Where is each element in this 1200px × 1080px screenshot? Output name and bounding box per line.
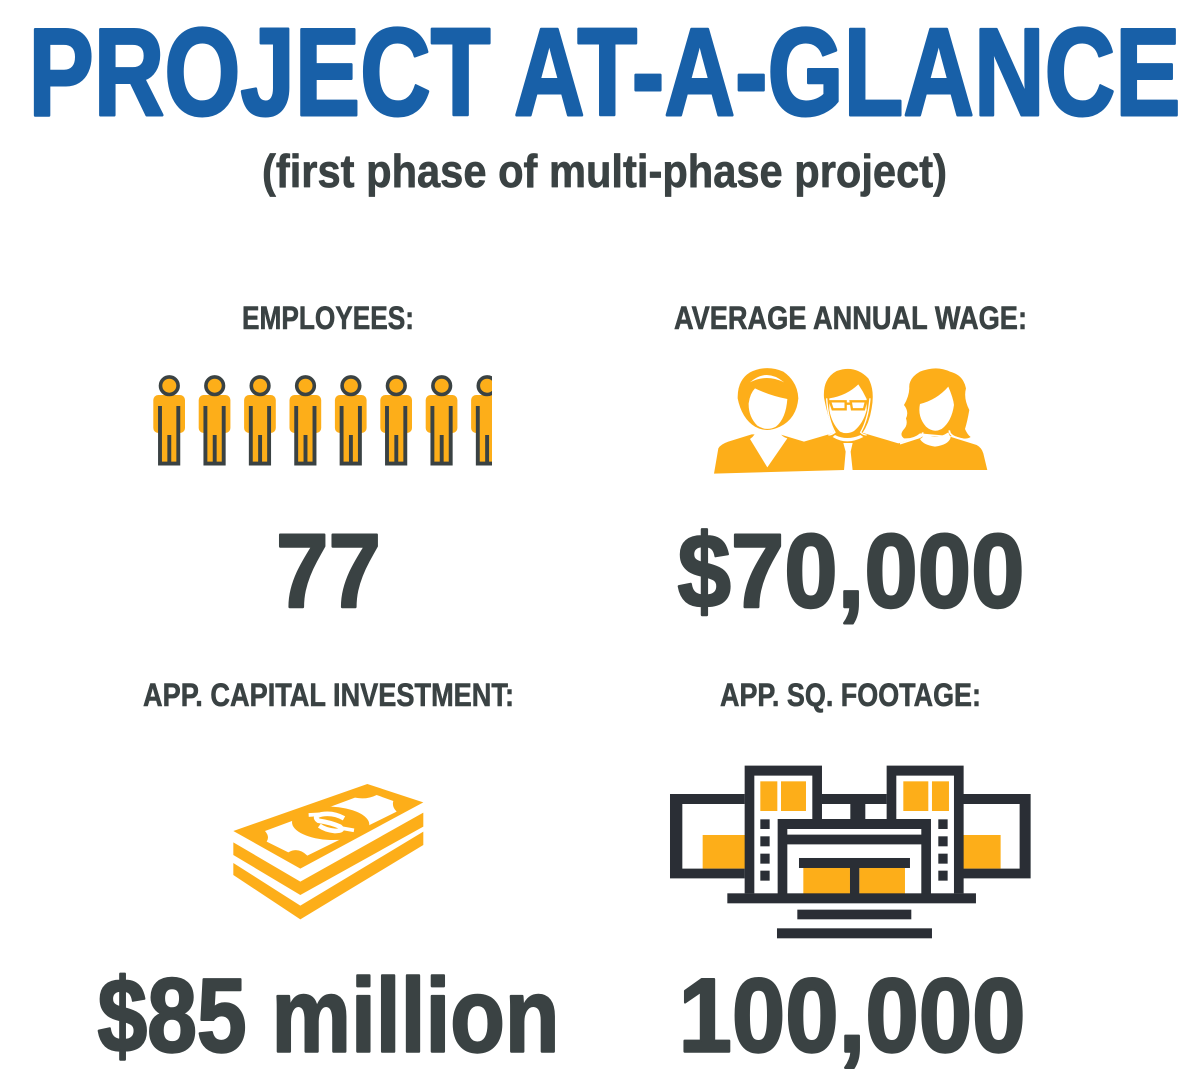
woman two face <box>919 387 954 431</box>
dollar sign <box>316 814 344 831</box>
necktie <box>843 443 853 470</box>
man hair <box>824 369 873 434</box>
orange windows <box>703 781 1001 894</box>
woman two hair <box>901 368 971 439</box>
panel: square footage <box>670 677 1031 1074</box>
investment label: APP. CAPITAL INVESTMENT: <box>143 677 514 713</box>
icon: building <box>670 766 1031 938</box>
shoulders <box>714 433 987 474</box>
subtitle: (first phase of multi-phase project) <box>262 145 947 197</box>
woman one hair <box>738 368 798 430</box>
dark frame <box>670 766 1031 938</box>
woman one face <box>749 388 787 429</box>
panel: capital investment <box>98 677 560 1074</box>
bill face <box>265 795 397 856</box>
wage value: $70,000 <box>678 513 1024 630</box>
panel: employees <box>153 306 492 608</box>
investment value: $85 million <box>98 958 560 1074</box>
man face and glasses <box>827 398 870 435</box>
employees label: EMPLOYEES: <box>242 300 414 336</box>
icon: three people busts <box>714 368 987 474</box>
panel: average annual wage <box>674 300 1027 630</box>
icon: row of people <box>153 377 503 464</box>
bill medallion <box>291 805 370 841</box>
icon: stack of money <box>233 784 423 919</box>
employees value: 77 <box>276 513 381 630</box>
footage label: APP. SQ. FOOTAGE: <box>720 677 981 713</box>
wage label: AVERAGE ANNUAL WAGE: <box>674 300 1027 336</box>
footage value: 100,000 <box>678 958 1026 1074</box>
